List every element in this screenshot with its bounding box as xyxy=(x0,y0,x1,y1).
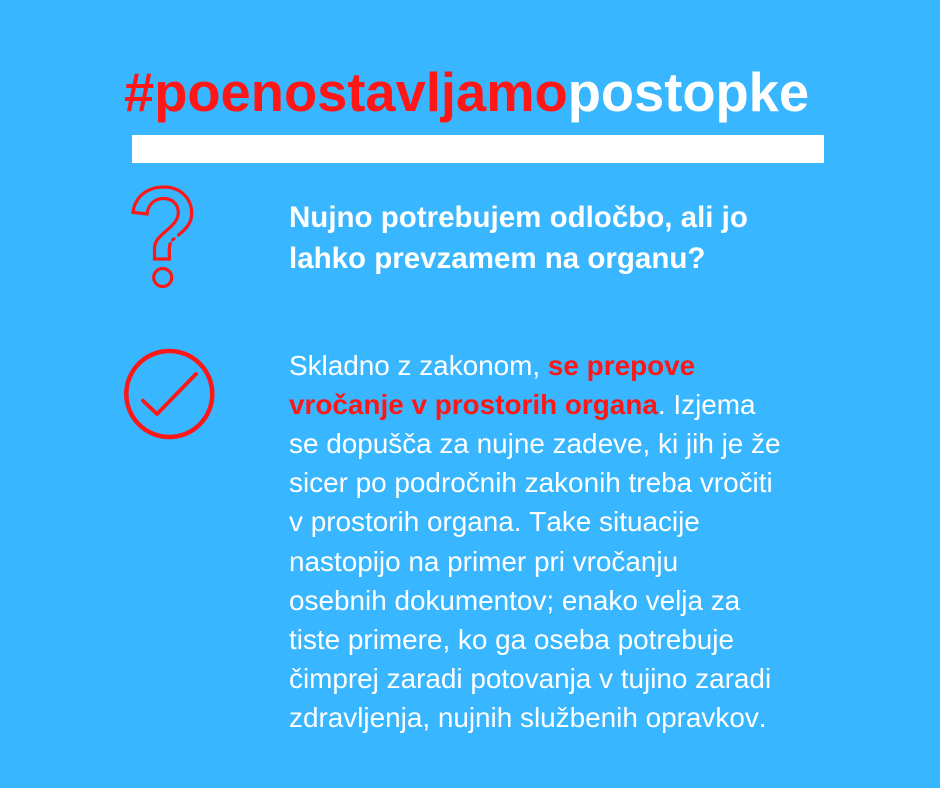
answer text: Skladno z zakonom, se prepove xyxy=(289,350,695,380)
question text xyxy=(289,200,748,274)
answer text: osebnih dokumentov; enako velja za xyxy=(289,585,740,616)
answer text: zdravljenja, nujnih službenih opravkov. xyxy=(289,702,767,733)
answer text: vročanje v prostorih organa. Izjema xyxy=(289,389,756,420)
answer text: čimprej zaradi potovanja v tujino zaradi xyxy=(289,663,771,694)
answer text: tiste primere, ko ga oseba potrebuje xyxy=(289,624,734,655)
answer text xyxy=(289,350,780,733)
answer text: se dopušča za nujne zadeve, ki jih je že xyxy=(289,428,780,459)
question text: Nujno potrebujem odločbo, ali jo xyxy=(289,200,748,234)
answer text: v prostorih organa. Take situacije xyxy=(289,506,700,537)
icon: check mark in circle xyxy=(124,348,215,440)
question text: lahko prevzamem na organu? xyxy=(289,242,705,274)
answer text: nastopijo na primer pri vročanju xyxy=(289,546,678,576)
title: #poenostavljamopostopke xyxy=(124,62,809,123)
title underline bar xyxy=(132,135,824,163)
answer text: sicer po področnih zakonih treba vročiti xyxy=(289,467,773,498)
icon: question mark xyxy=(131,185,194,288)
